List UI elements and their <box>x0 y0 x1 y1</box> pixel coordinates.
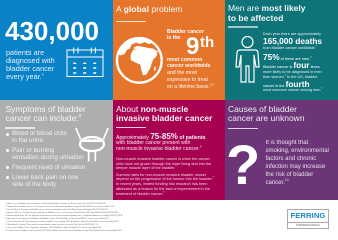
heading: cancer can include:9 <box>6 113 81 123</box>
panel: non-muscle invasive: attributed as a reason for the lack of improvement in the <box>116 187 210 191</box>
panel: non-muscle invasive: non-muscle invasive bladder cancer.5 <box>116 145 202 152</box>
heading: to be affected <box>228 12 283 22</box>
list: symptoms: Blood or blood clots <box>12 130 67 137</box>
number suffix: th: th <box>200 34 214 51</box>
heading <box>228 3 306 22</box>
panel: men most likely <box>225 0 338 100</box>
panel: symptoms <box>0 100 113 200</box>
description: bladder cancer <box>6 64 54 72</box>
text: statistics: Each year there are approximately <box>263 32 321 36</box>
text: ranking: Bladder cancer <box>167 29 204 35</box>
heading: cancer are unknown <box>228 113 305 123</box>
text: ranking detail: on a lifetime basis.2,3 <box>167 82 214 90</box>
list: symptoms: side of the body <box>12 181 56 188</box>
text: details: cells have not grown through the inner lining and into the <box>116 162 211 166</box>
heading: Symptoms of bladder <box>6 104 86 114</box>
panel: men most likely: than women.5 In the US, bladder <box>263 74 318 78</box>
description: patients are <box>6 48 44 56</box>
text: ranking detail: expensive to treat <box>167 77 208 83</box>
panel: non-muscle invasive <box>113 100 225 200</box>
footer references: 4. Mariani, MF et al. The effect of age and gender on bladder cancer: a critical review of the literature. BJU International 2010;105(3):300-308. <box>6 212 118 214</box>
text: causes: factors and chronic <box>266 156 316 162</box>
heading: invasive bladder cancer <box>116 113 212 123</box>
list: symptoms: Lower back pain on one <box>12 174 78 181</box>
panel: non-muscle invasive: Survival rates for non-muscle invasive bladder cancer <box>116 173 206 177</box>
heading <box>116 104 212 123</box>
text: ranking <box>167 29 204 41</box>
panel: non-muscle invasive: with bladder cancer present with <box>116 140 190 146</box>
icon: question mark: ? <box>226 132 260 196</box>
heading: Causes of bladder <box>228 104 297 114</box>
heading <box>228 104 305 123</box>
logo: Ferring Pharmaceuticals <box>287 209 329 229</box>
panel: men most likely: cancer is the fourth <box>263 79 310 89</box>
icon: person <box>235 36 260 83</box>
footer references: 10. Global Cancer Intelligence for Europeans 2017. NHS. Bladder Cancer Prevention. Available at: https://bit.ly/2IjPwB7 Last accessed: April 2019. <box>6 230 122 232</box>
text: details: deeper muscle layer of the bladder.7 <box>116 166 176 170</box>
text: ranking: is the <box>167 35 180 41</box>
text: causes <box>266 140 329 186</box>
panel: causes unknown <box>225 100 338 200</box>
panel: non-muscle invasive: treatment of bladder cancer.8 <box>116 192 164 196</box>
list: symptoms: Frequent need of urination <box>12 164 85 171</box>
heading: About non-muscle <box>116 104 188 114</box>
panel: men most likely: more likely to be diagnosed in men <box>263 70 322 74</box>
panel: non-muscle invasive: In recent years, limited funding into research has been <box>116 182 207 186</box>
footer references: 9. Cancer.Net. Bladder Cancer: Symptoms and Signs. 2017. Available at: https://bit.ly/2oLoIT7 Last accessed: April 2019. <box>6 227 102 229</box>
logo: Ferring Pharmaceuticals: PHARMACEUTICALS <box>296 224 320 226</box>
heading: A global problem <box>116 4 182 14</box>
text: ranking detail: and the most <box>167 70 197 76</box>
footer references <box>6 202 123 232</box>
footer references: 6. American Cancer Society. Key Statistics for Bladder Cancer. 2019. Available at: https://bit.ly/2dfD7yY Last accessed: April 2019. <box>6 218 109 220</box>
text: causes: the risk of bladder <box>266 172 313 178</box>
panel: a global problem <box>113 0 225 100</box>
footer references: 8. Nikolaidou A, Gontero P. Non-muscle invasive bladder cancer and what can we do? Nat Rev Urol 2018;15(2):1-10. <box>6 224 98 226</box>
panel: men most likely: 75% of these are men.4 <box>263 52 311 62</box>
footer references: 2. Medical News. Bladder Cancer is the Sixteen Cancer with a Big Impact. Available at: https://bit.ly/2vN3UGY Last accessed: April 2019. <box>6 206 114 208</box>
heading <box>6 104 86 123</box>
description <box>6 48 55 80</box>
panel: men most likely: 165,000 deaths <box>263 36 322 46</box>
logo: Ferring Pharmaceuticals: FERRING <box>291 211 325 220</box>
panel: non-muscle invasive: depend on the progression of the tumour into the bladder.8 <box>116 177 214 181</box>
footer references: 3. Svatek RS et al. Economics of bladder cancer: what are the benefits and costs? World Journal of Urology 2009;27(3):289-293. <box>6 209 108 211</box>
panel: men most likely: most common cancer among men.6 <box>263 87 323 92</box>
list: symptoms: sensation during urination <box>12 154 84 161</box>
text: prevalence: Approximately 75-85% of patients <box>116 132 206 140</box>
icon: calendar <box>66 48 104 77</box>
footer references: 1. Antoni, S et al. Bladder Cancer Incidence and Mortality: A Global Overview and Recent Trends. Eur Urol 2017;71(1):96-108. <box>6 202 106 204</box>
icon: bladder <box>75 128 109 162</box>
text: ranking detail <box>167 57 214 90</box>
panel: patients per year <box>0 0 113 100</box>
text: causes: cancer.10 <box>266 178 289 186</box>
text: ranking detail: most common <box>167 57 202 63</box>
text: causes: It is thought that <box>266 140 308 146</box>
list: symptoms: in the urine <box>12 137 43 144</box>
icon: globe <box>116 36 163 84</box>
text: causes: infection may increase <box>266 164 325 170</box>
description: every year.1 <box>6 71 44 80</box>
footer references: 7. Cancer Research UK. Early non-muscle invasive bladder cancer staging. 2019. Available at: https://bit.ly/2PgYdkZ Last accessed: April 2019. <box>6 221 120 223</box>
panel: men most likely: Bladder cancer is four times <box>263 60 320 70</box>
heading: Men are most likely <box>228 3 305 13</box>
list: symptoms <box>6 130 85 188</box>
number: 9: 9 <box>186 33 199 60</box>
text: ranking detail: cancer worldwide <box>167 63 211 69</box>
text: causes: smoking, environmental <box>266 148 329 154</box>
footer references: 5. Anastasiadis A, Boer TM. The diagnosis and treatment of non-muscle invasive bladder cancer. Therapeutic Advances in Urology 2012;4(1):13-32. <box>6 215 123 217</box>
description: diagnosed with <box>6 56 55 64</box>
big number: 430,000 <box>5 16 99 46</box>
text: details: Non-muscle invasive bladder cancer is when the cancer <box>116 157 210 161</box>
list: symptoms: Pain or burning <box>12 147 54 154</box>
text: details <box>116 157 211 170</box>
panel: men most likely: from bladder cancer worldwide.4 <box>263 45 317 50</box>
